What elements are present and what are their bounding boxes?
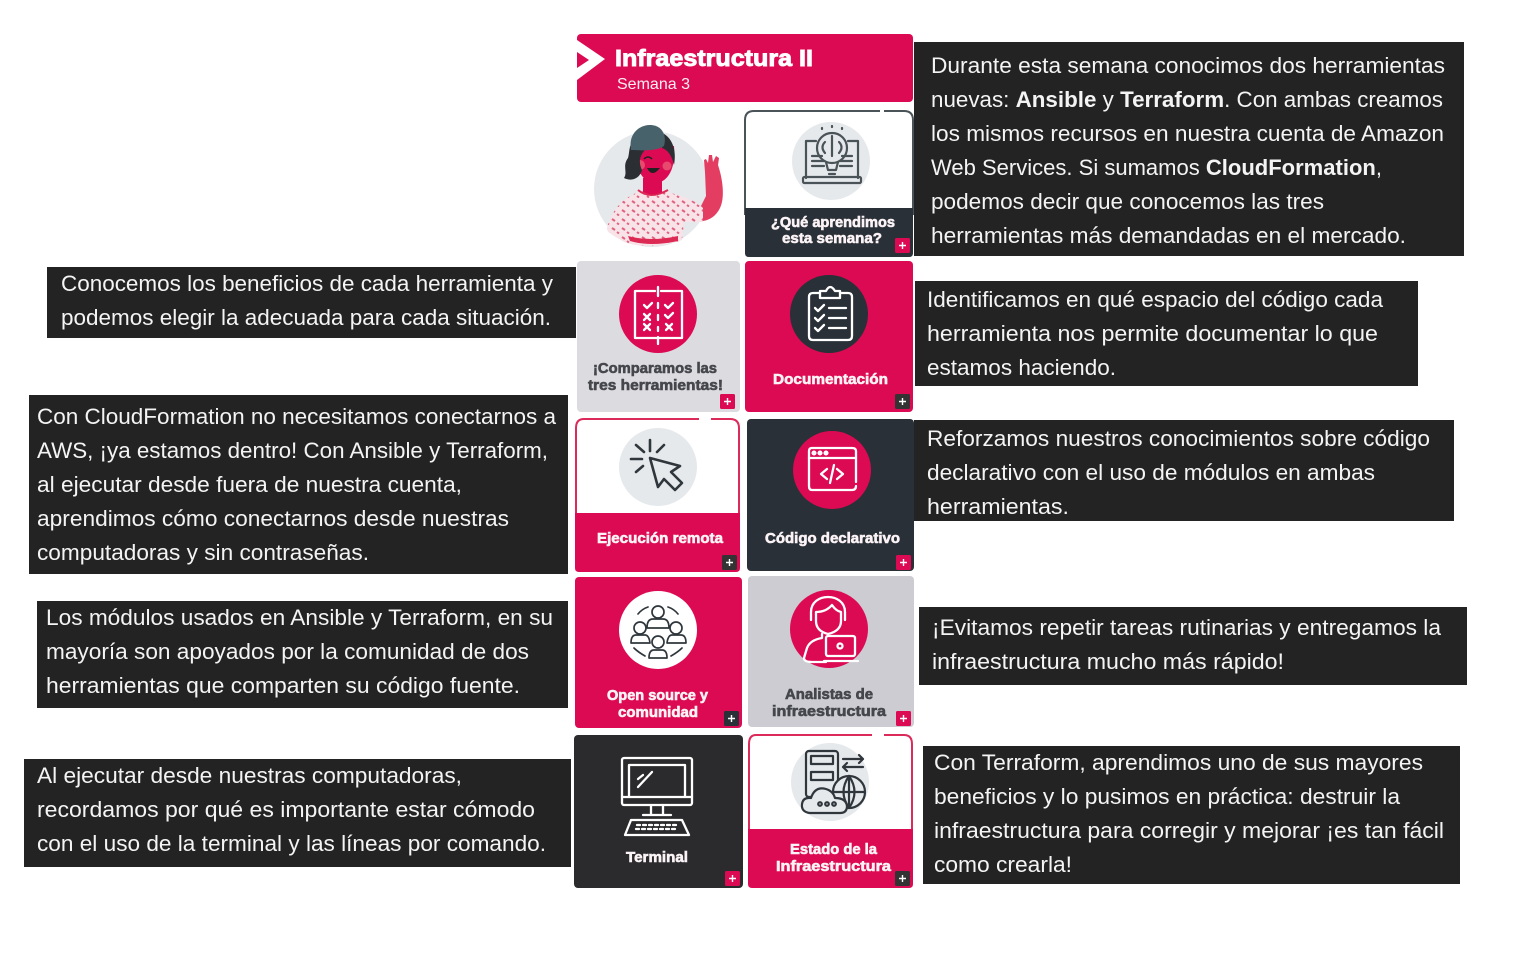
card: comparison bbox=[577, 261, 740, 412]
icon: server, globe and cloud bbox=[791, 743, 869, 821]
panel: intro text: podemos decir que conocemos las tres bbox=[931, 189, 1324, 214]
panel: analysts text bbox=[919, 607, 1467, 685]
card: comparison: tres herramientas! bbox=[588, 378, 723, 394]
panel: declarative code text: declarativo con el uso de módulos en ambas bbox=[927, 460, 1375, 485]
panel: analysts text: infraestructura mucho más rápido! bbox=[932, 649, 1284, 674]
panel: terminal text: Al ejecutar desde nuestras computadoras, bbox=[37, 763, 462, 788]
card: infrastructure analysts: Analistas de bbox=[785, 687, 873, 703]
card: comparison: ¡Comparamos las bbox=[593, 361, 717, 377]
panel: comparison text: podemos elegir la adecuada para cada situación. bbox=[61, 305, 551, 330]
panel: declarative code text: herramientas. bbox=[927, 494, 1069, 519]
button: plus bbox=[724, 711, 739, 726]
button: plus bbox=[895, 871, 910, 886]
card: what we learned: esta semana? bbox=[782, 231, 882, 247]
card: terminal bbox=[574, 735, 743, 888]
card: declarative code: Código declarativo bbox=[765, 531, 900, 547]
panel: documentation text bbox=[915, 281, 1418, 386]
icon: desktop computer bbox=[622, 758, 692, 835]
panel: remote execution text: aprendimos cómo conectarnos desde nuestras bbox=[37, 506, 509, 531]
card: terminal: Terminal bbox=[626, 850, 688, 866]
icon: analyst with laptop bbox=[790, 590, 868, 668]
panel: declarative code text bbox=[914, 420, 1454, 521]
panel: remote execution text: computadoras y sin contraseñas. bbox=[37, 540, 369, 565]
panel: analysts text: ¡Evitamos repetir tareas rutinarias y entregamos la bbox=[932, 615, 1441, 640]
panel: terminal text bbox=[24, 759, 571, 867]
card: declarative code bbox=[747, 419, 914, 571]
button: plus bbox=[896, 711, 911, 726]
title banner: Semana 3 bbox=[617, 76, 690, 93]
panel: remote execution text: AWS, ¡ya estamos dentro! Con Ansible y Terraform, bbox=[37, 438, 548, 463]
panel: documentation text: estamos haciendo. bbox=[927, 355, 1116, 380]
card: remote execution bbox=[575, 419, 740, 572]
panel: open source text: herramientas que comparten su código fuente. bbox=[46, 673, 520, 698]
panel: intro text: herramientas más demandadas en el mercado. bbox=[931, 223, 1406, 248]
panel: intro text bbox=[914, 42, 1464, 256]
card: remote execution: Ejecución remota bbox=[597, 531, 724, 547]
panel: intro text: Web Services. Si sumamos CloudFormation, bbox=[931, 155, 1382, 180]
button: plus bbox=[725, 871, 740, 886]
button: plus bbox=[896, 555, 911, 570]
panel: terminal text: con el uso de la terminal y las líneas por comando. bbox=[37, 831, 546, 856]
icon: clipboard checklist bbox=[790, 275, 868, 353]
title banner: Infraestructura II bbox=[615, 45, 813, 71]
panel: declarative code text: Reforzamos nuestros conocimientos sobre código bbox=[927, 426, 1430, 451]
panel: intro text: los mismos recursos en nuestra cuenta de Amazon bbox=[931, 121, 1444, 146]
card: open source and community: comunidad bbox=[618, 705, 698, 721]
illustration: waving woman bbox=[594, 125, 723, 247]
card: open source and community: Open source y bbox=[607, 688, 708, 704]
panel: documentation text: Identificamos en qué espacio del código cada bbox=[927, 287, 1383, 312]
panel: remote execution text bbox=[29, 395, 568, 574]
card: infrastructure state bbox=[748, 735, 913, 888]
card: infrastructure state: Infraestructura bbox=[776, 859, 892, 875]
icon: community group bbox=[619, 591, 697, 669]
card: open source and community bbox=[575, 577, 742, 728]
card: documentation: Documentación bbox=[773, 372, 888, 388]
panel: infrastructure state text: como crearla! bbox=[934, 852, 1072, 877]
panel: comparison text: Conocemos los beneficios de cada herramienta y bbox=[61, 271, 554, 296]
panel: remote execution text: Con CloudFormation no necesitamos conectarnos a bbox=[37, 404, 556, 429]
panel: remote execution text: al ejecutar desde fuera de nuestra cuenta, bbox=[37, 472, 462, 497]
card: infrastructure analysts bbox=[748, 576, 914, 727]
icon: comparison checklist bbox=[619, 275, 697, 353]
panel: infrastructure state text: infraestructura para corregir y mejorar ¡es tan fácil bbox=[934, 818, 1444, 843]
card: what we learned bbox=[745, 111, 913, 257]
card: documentation bbox=[745, 261, 913, 412]
button: plus bbox=[720, 394, 735, 409]
icon: code window bbox=[793, 431, 871, 509]
panel: open source text: Los módulos usados en Ansible y Terraform, en su bbox=[46, 605, 553, 630]
panel: documentation text: herramienta nos permite documentar lo que bbox=[927, 321, 1378, 346]
card: infrastructure analysts: infraestructura bbox=[772, 704, 887, 720]
panel: intro text: Durante esta semana conocimos dos herramientas bbox=[931, 53, 1445, 78]
icon: cursor click bbox=[619, 428, 697, 506]
panel: infrastructure state text: Con Terraform, aprendimos uno de sus mayores bbox=[934, 750, 1423, 775]
button: plus bbox=[895, 394, 910, 409]
card: infrastructure state: Estado de la bbox=[790, 842, 878, 858]
button: plus bbox=[722, 555, 737, 570]
panel: comparison text bbox=[47, 267, 576, 338]
panel: infrastructure state text bbox=[923, 746, 1460, 884]
panel: infrastructure state text: beneficios y lo pusimos en práctica: destruir la bbox=[934, 784, 1400, 809]
title banner bbox=[577, 34, 913, 102]
panel: open source text: mayoría son apoyados por la comunidad de dos bbox=[46, 639, 529, 664]
card: what we learned: ¿Qué aprendimos bbox=[771, 215, 895, 231]
button: plus bbox=[895, 238, 910, 253]
icon: lightbulb and laptop bbox=[792, 122, 870, 200]
panel: terminal text: recordamos por qué es importante estar cómodo bbox=[37, 797, 535, 822]
panel: open source text bbox=[37, 601, 568, 708]
panel: intro text: nuevas: Ansible y Terraform. Con ambas creamos bbox=[931, 87, 1443, 112]
